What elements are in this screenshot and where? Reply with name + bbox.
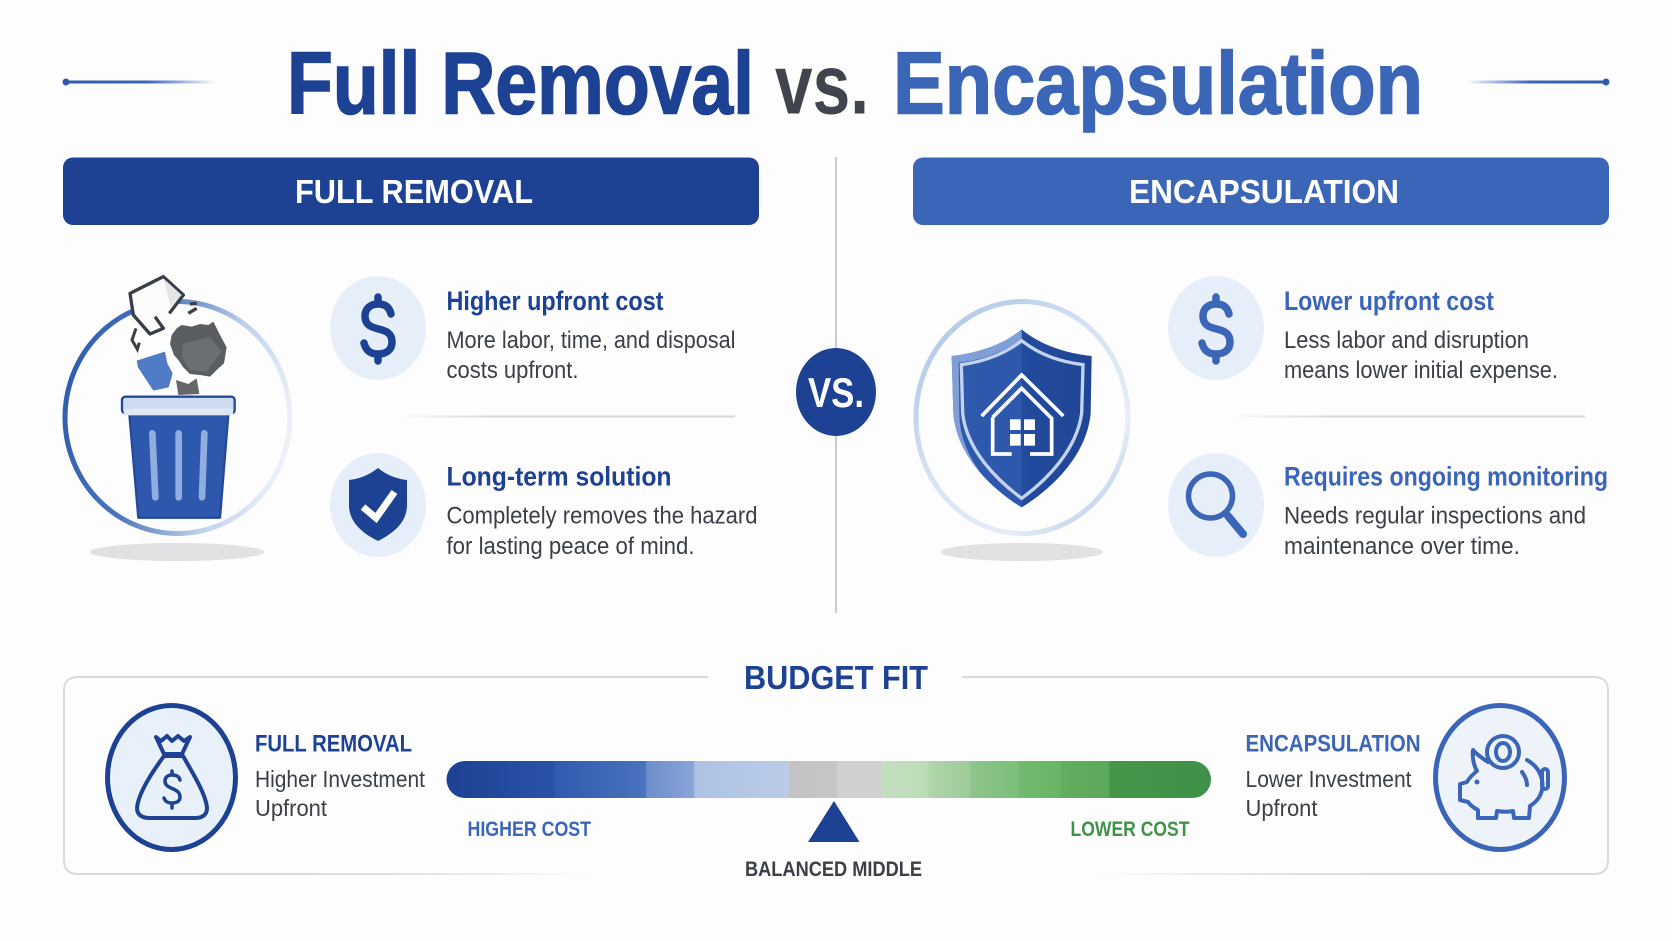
item: lower upfront cost: Lower upfront cost [1284, 286, 1494, 316]
text: full removal budget: Upfront [255, 795, 328, 821]
panel header: encapsulation: ENCAPSULATION [1129, 173, 1399, 210]
item: long-term solution: Completely removes the hazard [446, 502, 758, 530]
panel header: full removal [63, 158, 759, 225]
item: higher upfront cost: More labor, time, and disposal [446, 327, 736, 354]
center divider [835, 157, 837, 613]
icon: money bag [108, 706, 236, 850]
label: lower cost: LOWER COST [1070, 818, 1190, 841]
title [287, 34, 1423, 132]
title decorative line left [62, 78, 216, 86]
icon: shield check [330, 453, 426, 557]
text: full removal budget [255, 730, 426, 821]
item: higher upfront cost: Higher upfront cost [446, 286, 664, 316]
text: full removal budget: FULL REMOVAL [255, 730, 412, 758]
icon: piggy bank [1436, 706, 1564, 850]
item: higher upfront cost [330, 276, 736, 384]
panel header: encapsulation [913, 158, 1609, 225]
icon: dollar [1168, 276, 1264, 380]
title: Full Removal [287, 34, 754, 132]
vs badge: VS. [808, 369, 864, 416]
panel: budget fit [64, 659, 1608, 881]
icon: trash can with debris [65, 277, 290, 561]
vs badge [796, 348, 876, 436]
heading: budget fit: BUDGET FIT [744, 659, 928, 696]
item: lower upfront cost: Less labor and disruption [1284, 327, 1529, 354]
text: full removal budget: Higher Investment [255, 766, 426, 792]
title: vs. [775, 38, 869, 132]
title decorative line right [1466, 78, 1610, 86]
panel header: full removal: FULL REMOVAL [295, 173, 533, 210]
icon: dollar [330, 276, 426, 380]
gradient cost bar [446, 761, 1211, 798]
row divider right [1230, 416, 1585, 418]
label: higher cost: HIGHER COST [468, 818, 591, 841]
text: encapsulation budget: Lower Investment [1246, 766, 1412, 792]
item: requires ongoing monitoring: Needs regular inspections and [1284, 502, 1586, 530]
text: encapsulation budget [1246, 730, 1420, 821]
icon: magnifier [1168, 453, 1264, 557]
item: long-term solution: Long-term solution [446, 462, 672, 492]
text: encapsulation budget: ENCAPSULATION [1246, 730, 1420, 758]
item: requires ongoing monitoring [1168, 453, 1608, 560]
title: Encapsulation [893, 34, 1423, 132]
item: requires ongoing monitoring: maintenance over time. [1284, 533, 1520, 560]
row divider left [397, 416, 735, 418]
item: lower upfront cost [1168, 276, 1558, 384]
label: balanced middle: BALANCED MIDDLE [745, 858, 922, 881]
item: long-term solution [330, 453, 758, 560]
item: higher upfront cost: costs upfront. [446, 357, 578, 384]
marker triangle [808, 801, 860, 842]
text: encapsulation budget: Upfront [1246, 795, 1318, 821]
item: requires ongoing monitoring: Requires ongoing monitoring [1284, 462, 1608, 492]
item: long-term solution: for lasting peace of mind. [446, 533, 694, 560]
item: lower upfront cost: means lower initial expense. [1284, 357, 1558, 384]
icon: shield with house [916, 302, 1128, 561]
